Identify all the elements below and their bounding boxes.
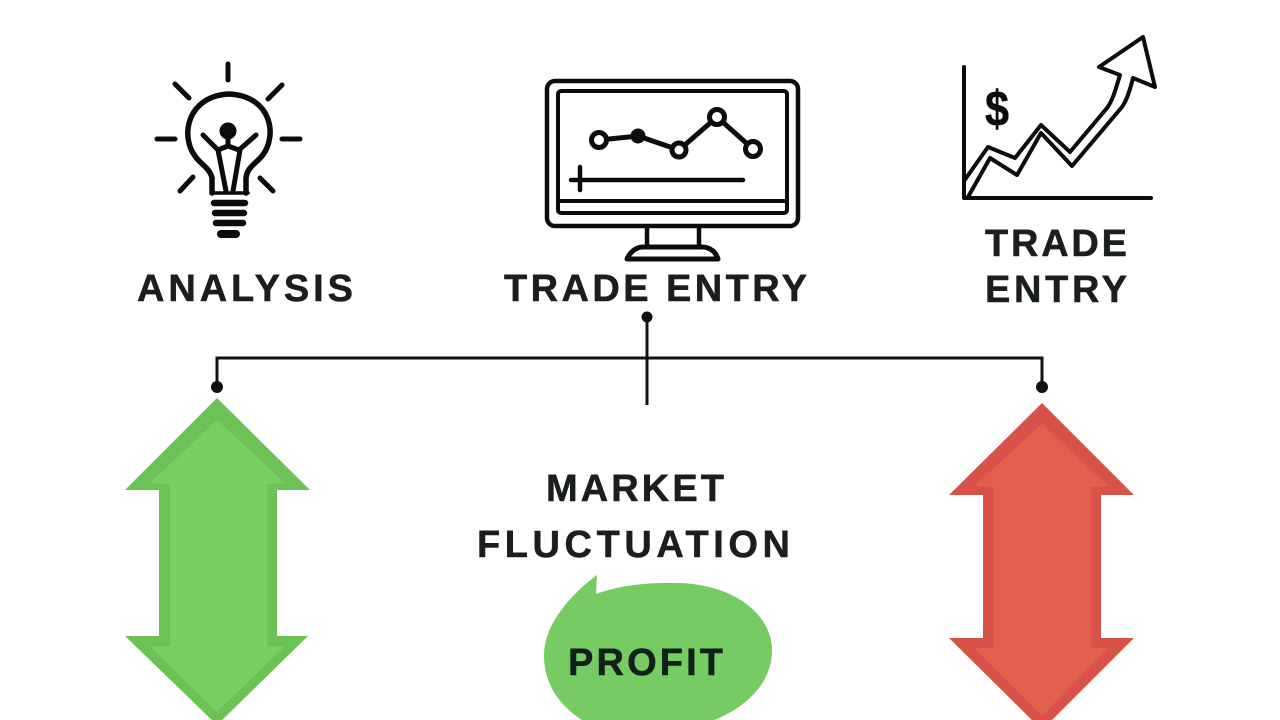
label: market fluctuation: FLUCTUATION <box>477 524 790 566</box>
arrow: green up and down <box>125 398 310 720</box>
icon: rising chart with dollar sign: $ <box>985 81 1009 137</box>
icon: monitor with line chart <box>547 81 798 259</box>
callout: profit bubble <box>544 575 772 720</box>
label: market fluctuation: MARKET <box>546 468 724 510</box>
callout: profit bubble: PROFIT <box>568 642 723 684</box>
label: trade entry right: TRADE <box>985 223 1127 265</box>
label: market fluctuation <box>477 468 790 566</box>
connector: branching lines <box>211 312 1048 405</box>
label: trade entry right <box>985 223 1127 311</box>
label: trade entry right: ENTRY <box>985 269 1127 311</box>
label: analysis: ANALYSIS <box>137 268 353 310</box>
arrow: red up and down <box>949 403 1134 720</box>
label: trade entry centre: TRADE ENTRY <box>504 268 807 310</box>
icon: rising chart with dollar sign <box>964 37 1155 198</box>
icon: light bulb <box>157 64 300 234</box>
